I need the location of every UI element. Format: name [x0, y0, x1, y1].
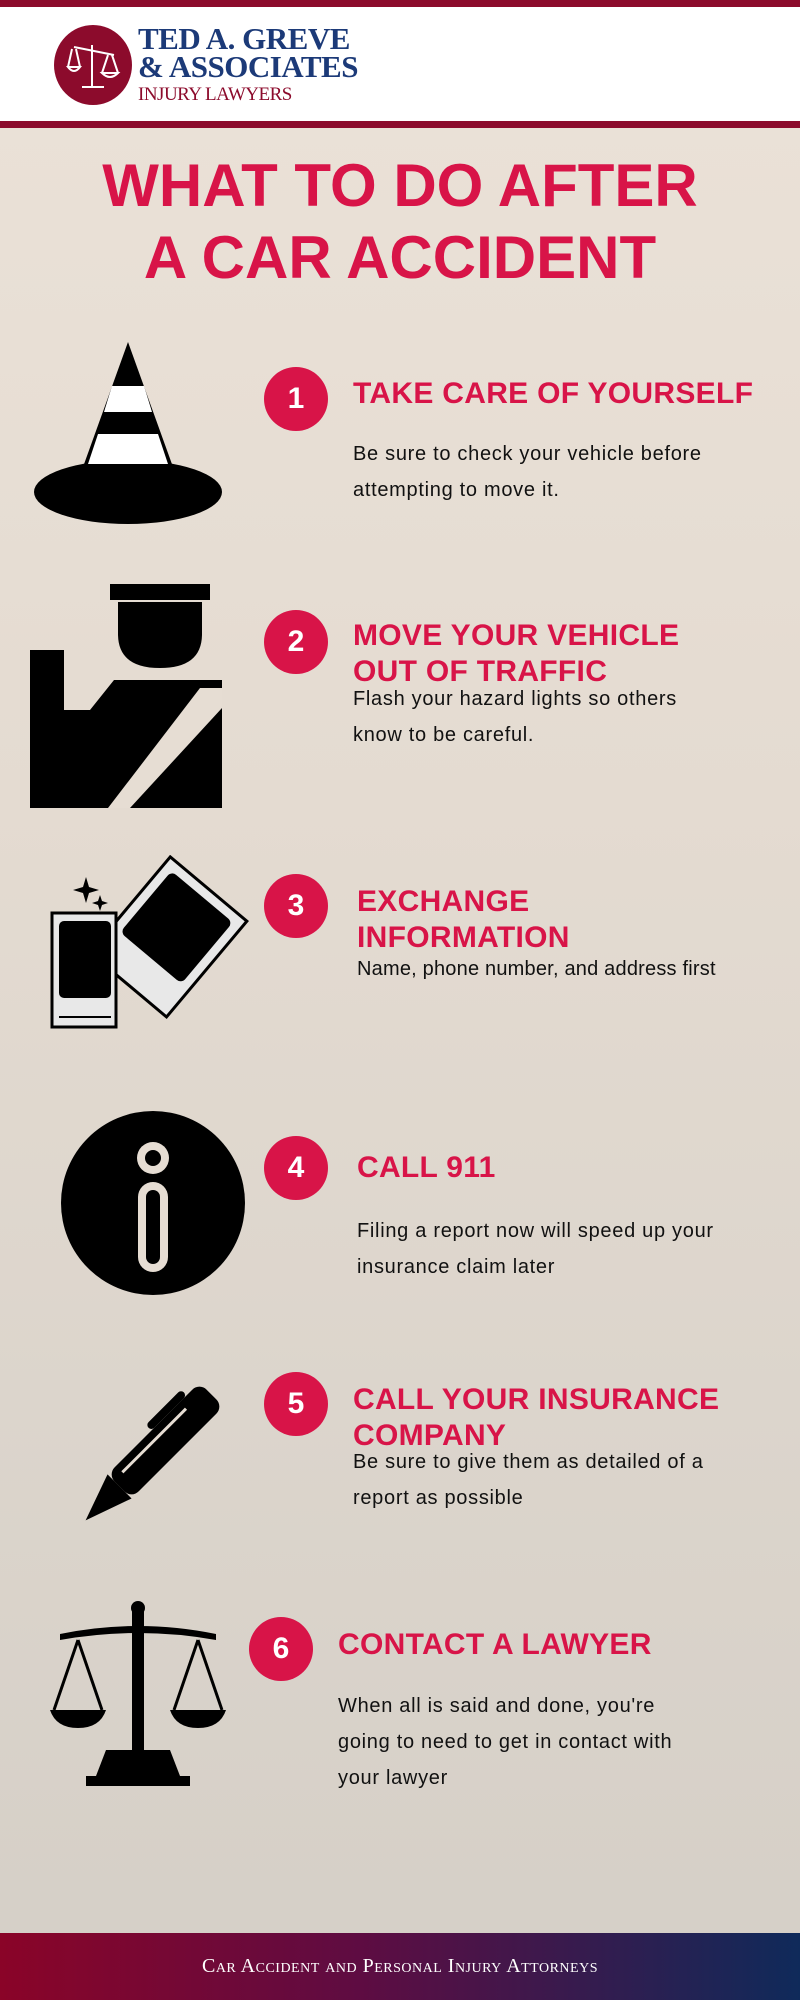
- step 5: [86, 1372, 719, 1520]
- text: When all is said and done, you're: [338, 1695, 655, 1717]
- number 2: 2: [288, 625, 304, 658]
- number 5: 5: [288, 1387, 304, 1420]
- number 3: 3: [288, 889, 304, 922]
- step 3: [50, 855, 716, 1028]
- step 1: [34, 342, 753, 524]
- number 3: [264, 874, 328, 938]
- number 4: [264, 1136, 328, 1200]
- icon: officer: [30, 584, 222, 808]
- text: know to be careful.: [353, 724, 534, 746]
- number 4: 4: [288, 1151, 304, 1184]
- heading: CALL 911: [357, 1151, 496, 1184]
- footer banner: Car Accident and Personal Injury Attorneys: [202, 1955, 598, 1977]
- text: going to need to get in contact with: [338, 1731, 672, 1753]
- number 6: 6: [273, 1632, 289, 1665]
- text: Be sure to give them as detailed of a: [353, 1451, 704, 1473]
- icon: info: [61, 1111, 245, 1295]
- text: [357, 1220, 714, 1278]
- number 1: 1: [288, 382, 304, 415]
- heading: MOVE YOUR VEHICLE: [353, 619, 679, 652]
- text: report as possible: [353, 1487, 523, 1509]
- text: [353, 688, 677, 746]
- heading: TAKE CARE OF YOURSELF: [353, 377, 753, 410]
- icon: traffic cone: [34, 342, 222, 524]
- text: insurance claim later: [357, 1256, 555, 1278]
- logo text: TED A. GREVE: [138, 21, 350, 56]
- logo text: & ASSOCIATES: [138, 49, 358, 84]
- heading: [353, 619, 679, 688]
- text: Be sure to check your vehicle before: [353, 443, 702, 465]
- step 2: [30, 584, 679, 808]
- footer banner: [0, 1933, 800, 2000]
- text: attempting to move it.: [353, 479, 560, 501]
- step 4: [61, 1111, 714, 1295]
- text: Filing a report now will speed up your: [357, 1220, 714, 1242]
- heading: INFORMATION: [357, 921, 570, 954]
- heading: CALL YOUR INSURANCE: [353, 1383, 719, 1416]
- title: [102, 152, 698, 291]
- icon: pen: [86, 1386, 220, 1520]
- heading: [353, 1383, 719, 1452]
- heading: EXCHANGE: [357, 885, 529, 918]
- number 5: [264, 1372, 328, 1436]
- heading: CONTACT A LAWYER: [338, 1628, 652, 1661]
- heading: OUT OF TRAFFIC: [353, 655, 607, 688]
- text: Name, phone number, and address first: [357, 958, 716, 980]
- text: your lawyer: [338, 1767, 448, 1789]
- icon: photos: [50, 855, 249, 1028]
- logo text: [138, 21, 358, 105]
- number 1: [264, 367, 328, 431]
- number 2: [264, 610, 328, 674]
- header bar: [0, 0, 800, 128]
- icon: scales: [50, 1601, 226, 1786]
- heading: [357, 885, 570, 954]
- title: A CAR ACCIDENT: [144, 224, 656, 291]
- number 6: [249, 1617, 313, 1681]
- step 6: [50, 1601, 672, 1789]
- text: [353, 443, 702, 501]
- title: WHAT TO DO AFTER: [102, 152, 698, 219]
- logo text: INJURY LAWYERS: [138, 84, 292, 105]
- text: [338, 1695, 672, 1789]
- heading: COMPANY: [353, 1419, 506, 1452]
- text: Flash your hazard lights so others: [353, 688, 677, 710]
- logo emblem: [54, 25, 132, 105]
- text: [353, 1451, 704, 1509]
